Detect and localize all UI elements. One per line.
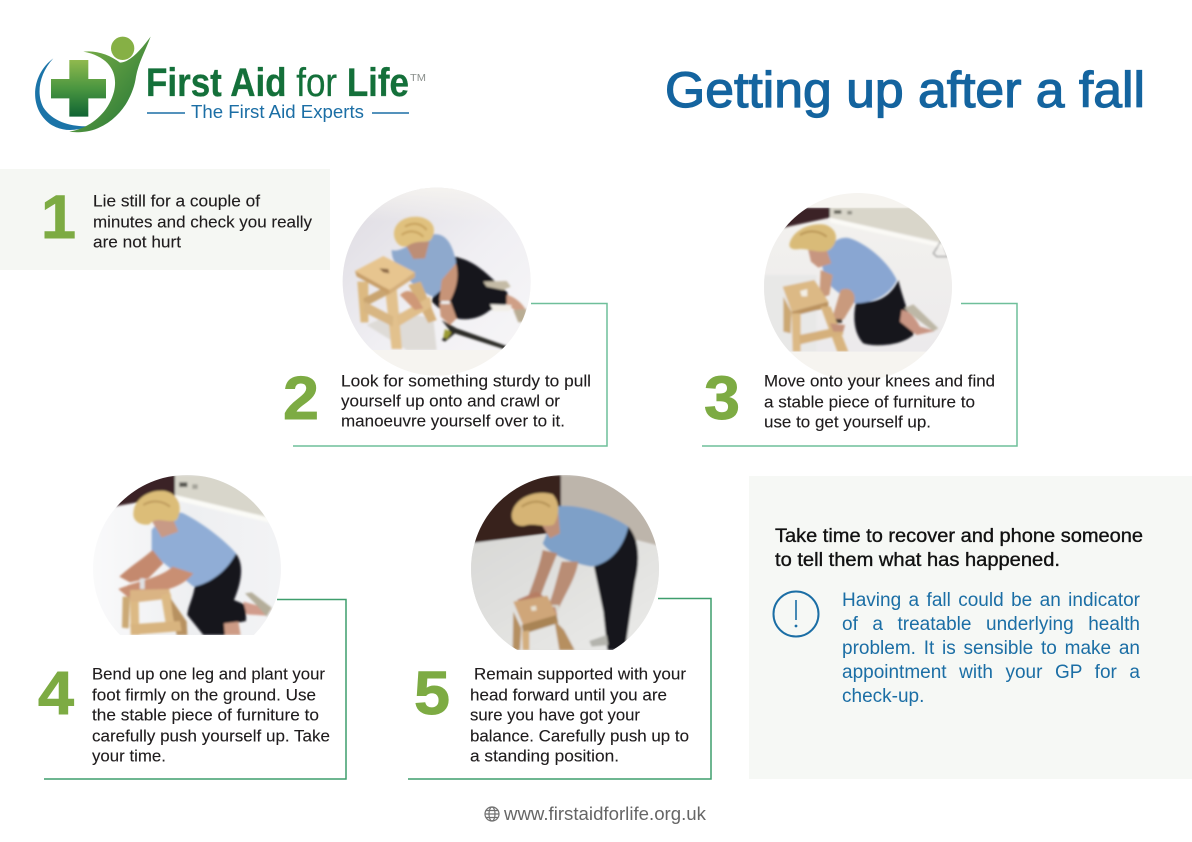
advice heading [775, 526, 1143, 571]
step 1 number: 1 [41, 183, 76, 251]
step 5 number: 5 [414, 659, 450, 727]
advice body text: of a treatable underlying health [842, 614, 1140, 635]
step 5 text: Remain supported with your [474, 664, 686, 684]
step 4 text: carefully push yourself up. Take [92, 726, 330, 746]
step 4 text: foot firmly on the ground. Use [92, 686, 316, 704]
step 2 text: yourself up onto and crawl or [341, 392, 560, 410]
step 5 text [470, 664, 689, 766]
trademark: TM [410, 73, 426, 84]
website address: www.firstaidforlife.org.uk [503, 803, 707, 824]
step 5 text: sure you have got your [470, 706, 640, 724]
photo: woman on the floor beside stool [342, 188, 530, 376]
step 1 text [93, 192, 312, 252]
advice heading: to tell them what has happened. [775, 550, 1060, 571]
icon: exclamation in circle [774, 592, 818, 636]
panel: recovery advice [749, 476, 1192, 779]
step 4 text [92, 664, 330, 766]
panel: step 3 [702, 193, 1030, 446]
photo: woman kneeling at stool [764, 193, 952, 381]
step 4 text: the stable piece of furniture to [92, 706, 319, 724]
step 5 connector frame [408, 598, 711, 779]
step 2 text: manoeuvre yourself over to it. [341, 412, 565, 430]
advice body text [842, 590, 1140, 707]
step 1 text: Lie still for a couple of [93, 192, 260, 210]
advice body text: Having a fall could be an indicator [842, 590, 1140, 611]
step 5 text: balance. Carefully push up to [470, 726, 689, 746]
step 3 number: 3 [704, 364, 740, 432]
step 3 text: Move onto your knees and find [764, 372, 995, 390]
icon: globe [485, 807, 499, 821]
step 4 text: your time. [92, 746, 166, 766]
photo: woman leaning on stool, one knee up [115, 475, 281, 635]
step 2 number: 2 [283, 364, 319, 432]
logo: First Aid for Life [35, 37, 426, 132]
step 1 background [0, 169, 330, 270]
step 3 text: a stable piece of furniture to [764, 392, 975, 412]
advice background [749, 476, 1192, 779]
step 3 text: use to get yourself up. [764, 412, 931, 432]
step 5 text: a standing position. [470, 746, 619, 766]
logo tagline: The First Aid Experts [191, 101, 364, 122]
panel: step 2 [283, 185, 620, 446]
step 4 connector frame [44, 600, 346, 779]
step 1 text: minutes and check you really [93, 212, 312, 232]
step 4 number: 4 [38, 659, 74, 727]
photo: woman standing bent over stool [471, 475, 659, 650]
step 3 connector frame [702, 304, 1017, 446]
step 1 text: are not hurt [93, 232, 181, 252]
step 2 text [341, 372, 591, 430]
step 4 text: Bend up one leg and plant your [92, 664, 325, 684]
icon: logo emblem [35, 37, 151, 132]
panel: step 1 [0, 169, 330, 270]
logo wordmark: First Aid for Life [146, 61, 409, 105]
step 5 text: head forward until you are [470, 686, 667, 704]
advice heading: Take time to recover and phone someone [775, 526, 1143, 547]
step 2 connector frame [293, 304, 607, 446]
step 3 text [764, 372, 995, 432]
step 2 text: Look for something sturdy to pull [341, 372, 591, 390]
panel: step 4 [38, 465, 360, 779]
advice body text: problem. It is sensible to make an [842, 638, 1140, 659]
advice body text: appointment with your GP for a [842, 662, 1140, 683]
advice body text: check-up. [842, 686, 924, 707]
panel: step 5 [408, 465, 720, 779]
title: Getting up after a fall [665, 62, 1145, 118]
